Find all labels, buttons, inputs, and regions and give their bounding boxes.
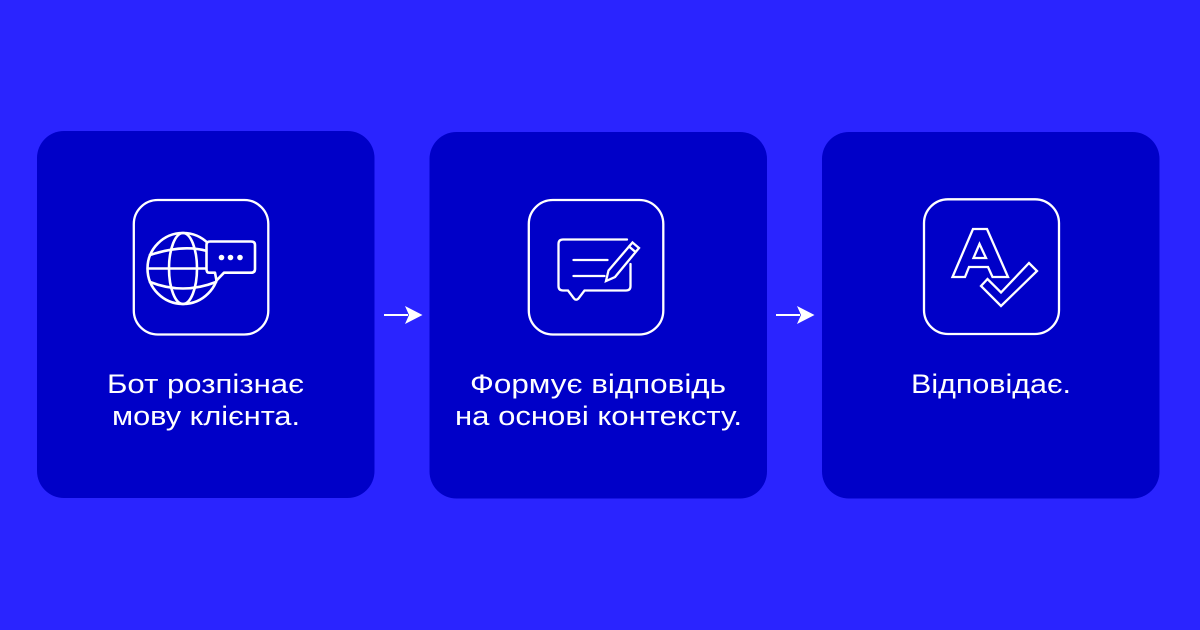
- panel: language recognition: [37, 131, 374, 498]
- text: step 2: Формує відповідь: [470, 369, 726, 399]
- icon: letter A with check mark: [924, 199, 1059, 334]
- icon: message with pencil: [529, 200, 663, 334]
- arrow: step 1 to step 2: [384, 306, 422, 324]
- text: step 1: [107, 369, 304, 431]
- text: step 1: мову клієнта.: [112, 401, 300, 431]
- text: step 1: Бот розпізнає: [107, 369, 304, 399]
- panel: reply: [822, 132, 1160, 498]
- text: step 2: [455, 369, 742, 431]
- arrow: step 2 to step 3: [776, 306, 814, 324]
- text: step 3: Відповідає.: [911, 369, 1071, 399]
- icon: globe with speech bubble: [134, 200, 268, 334]
- text: step 2: на основі контексту.: [455, 401, 742, 431]
- panel: response forming: [430, 132, 767, 498]
